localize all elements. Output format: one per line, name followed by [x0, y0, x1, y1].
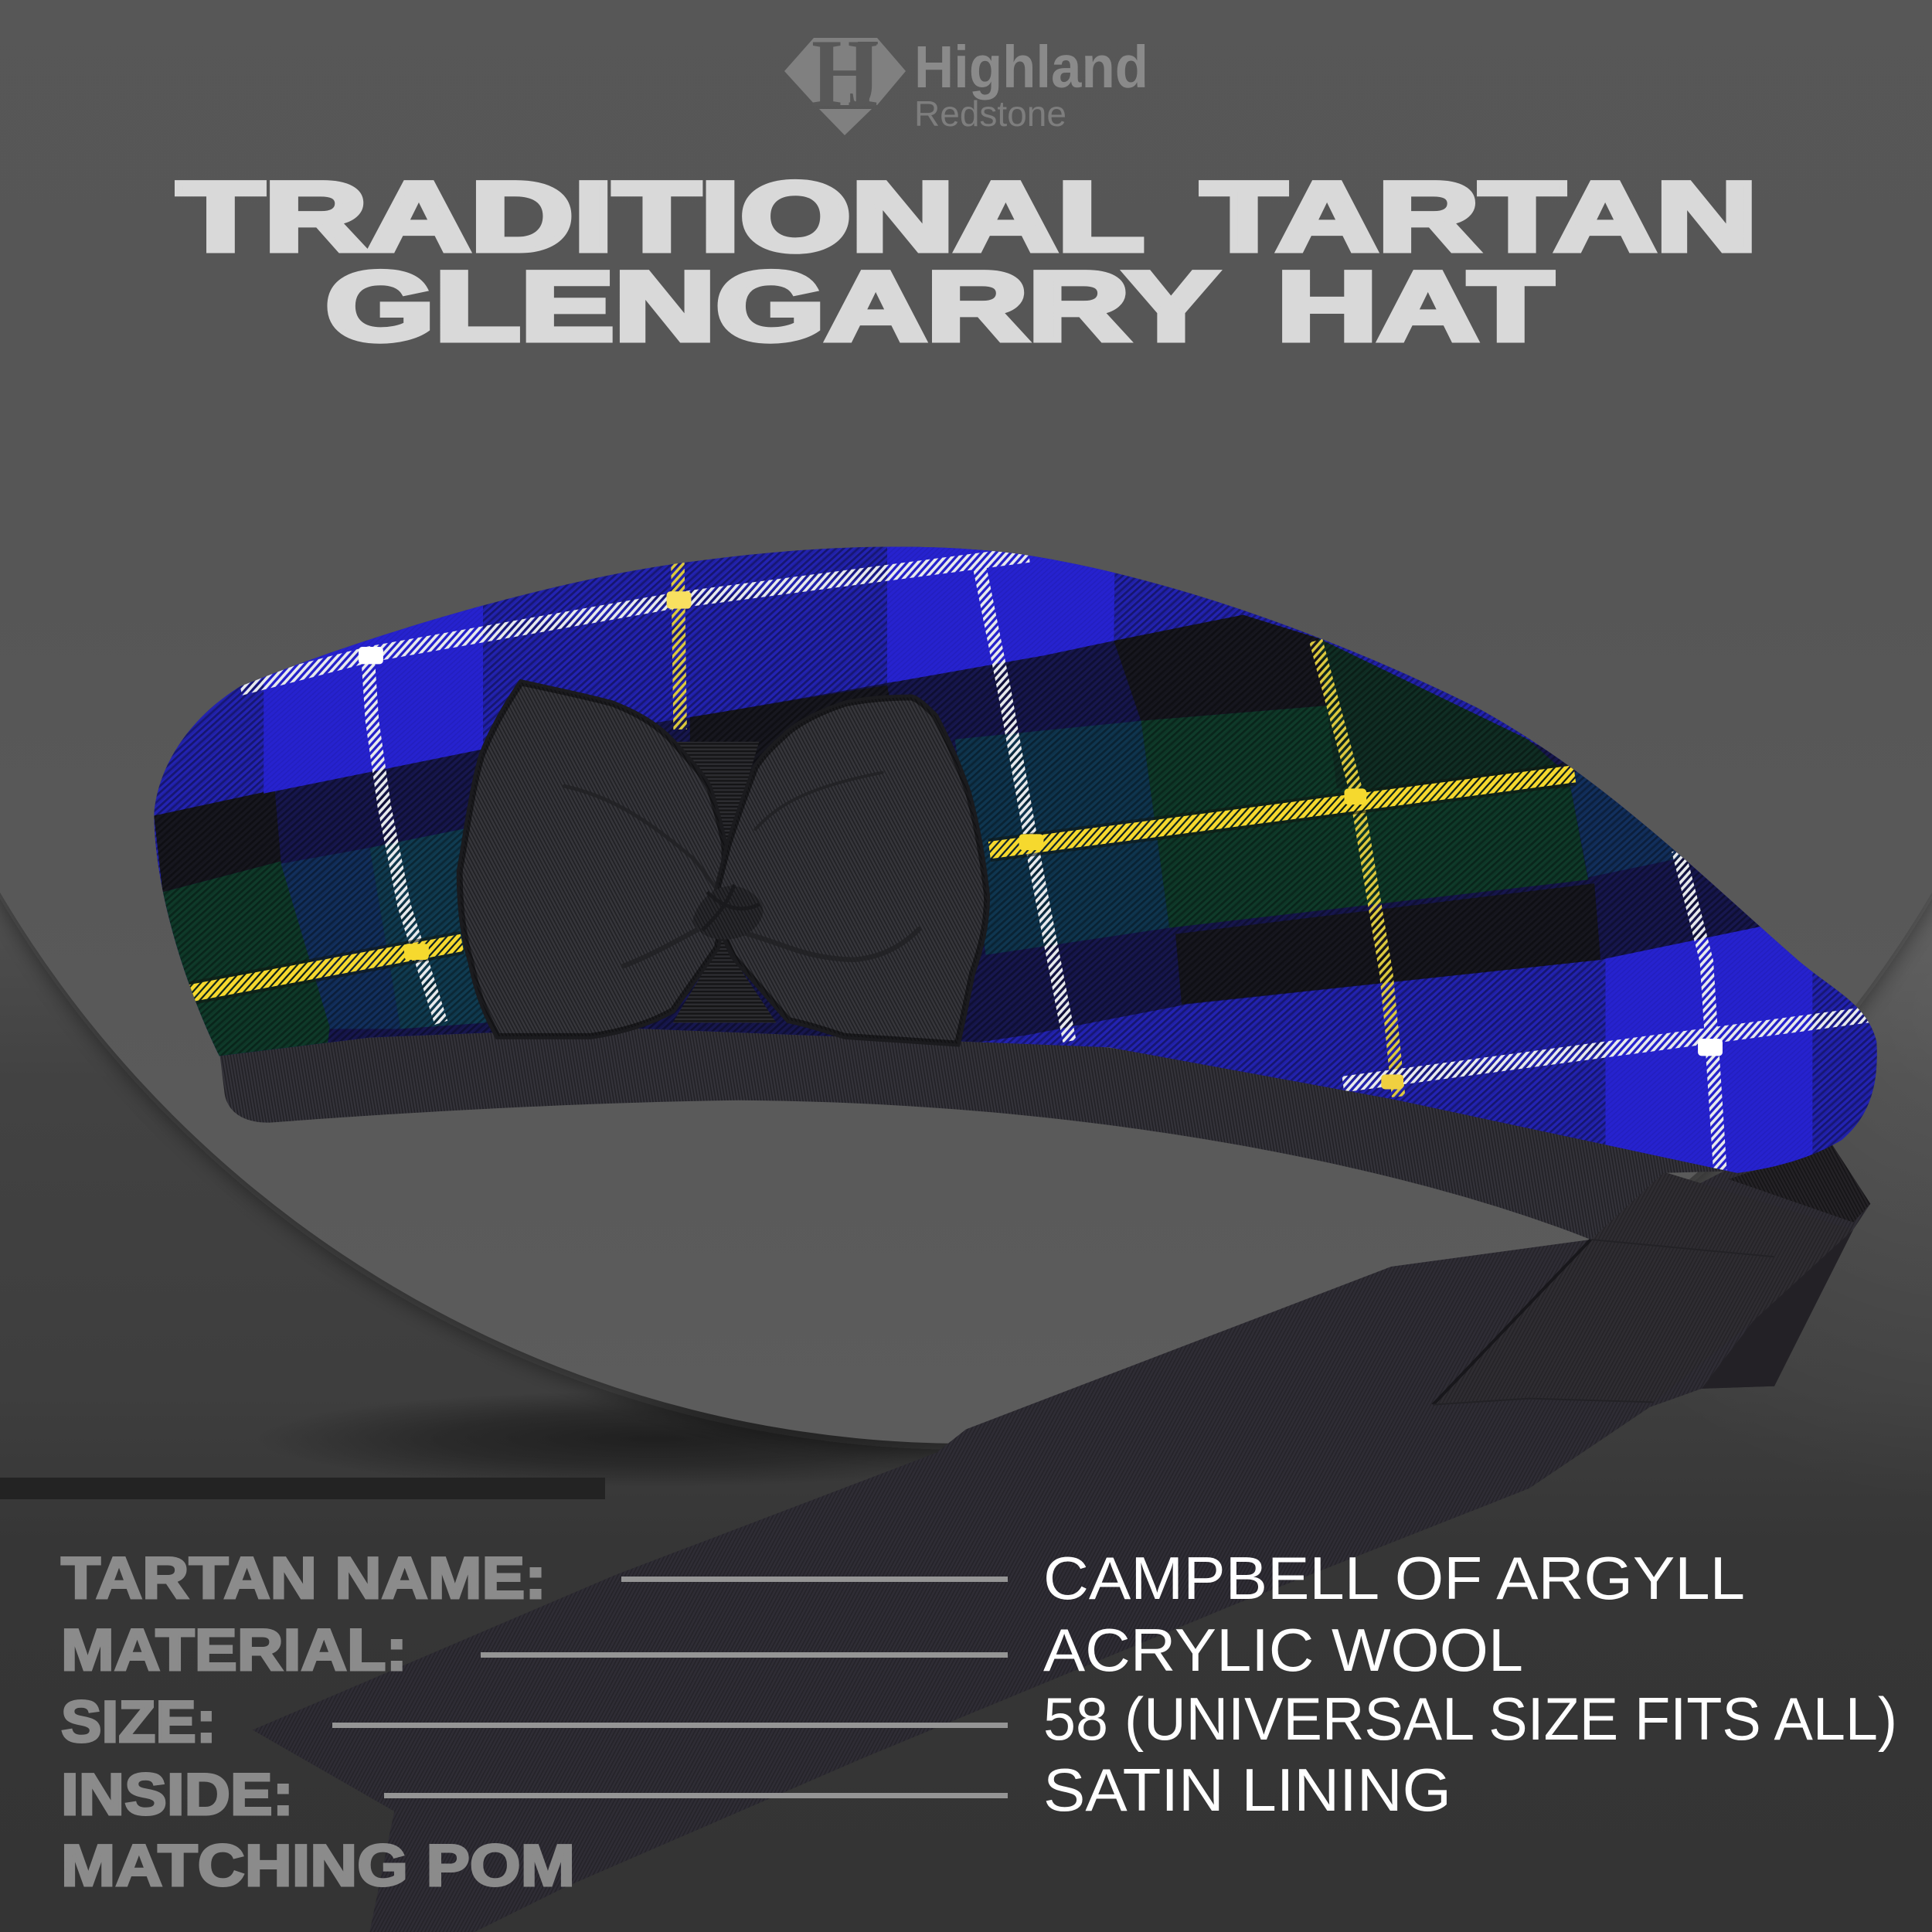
knot [1729, 1145, 1870, 1223]
spec values [1043, 1544, 1897, 1824]
bow centre strap [673, 742, 776, 1022]
green checks [162, 638, 1588, 1084]
bow [460, 682, 987, 1043]
spec values: ACRYLIC WOOL [1043, 1616, 1523, 1684]
spec labels: MATERIAL: [61, 1617, 407, 1683]
title: GLENGARRY [325, 251, 1218, 361]
bright blue checks [264, 530, 1812, 1183]
ribbon tail [253, 1145, 1870, 1932]
connector lines [332, 1577, 1008, 1798]
spec labels [61, 1546, 575, 1899]
spec values: 58 (UNIVERSAL SIZE FITS ALL) [1043, 1685, 1897, 1753]
spec labels: INSIDE: [61, 1762, 294, 1828]
logo name: Highland [914, 34, 1148, 100]
bow right wing [713, 697, 987, 1043]
logo [784, 20, 1148, 135]
horizontal pinstripes [191, 554, 1872, 1084]
logo mark: H [811, 20, 878, 128]
title: TARTAN [1201, 162, 1757, 271]
base blue [154, 547, 1877, 1173]
logo subname: Redstone [914, 94, 1066, 134]
spec labels: MATCHING POM [61, 1833, 575, 1899]
vertical pinstripes [367, 560, 1720, 1171]
footer accent bar [0, 1478, 605, 1499]
logo mark: J [849, 20, 879, 128]
bow folds [564, 773, 919, 966]
spec values: CAMPBELL OF ARGYLL [1043, 1544, 1745, 1612]
spec labels: SIZE: [61, 1689, 216, 1755]
tartan crown [154, 547, 1877, 1173]
stripe crossings [359, 591, 1723, 1089]
bow left wing [460, 682, 725, 1036]
hat band [219, 1025, 1750, 1240]
woven texture [155, 547, 1877, 1173]
logo mark [784, 20, 906, 135]
title: TRADITIONAL [177, 162, 1145, 271]
spec labels: TARTAN NAME: [61, 1546, 546, 1611]
background circle [0, 0, 1932, 1487]
spec values: SATIN LINING [1043, 1756, 1451, 1824]
blue-green checks [281, 721, 1719, 1029]
dark band base [155, 615, 1760, 1056]
fold creases [1433, 1240, 1590, 1405]
title [177, 162, 1757, 361]
back lobe [1702, 1230, 1853, 1389]
title: HAT [1277, 251, 1553, 361]
hat [123, 518, 1932, 1932]
background right glow [1391, 464, 1932, 1546]
bow knot [692, 885, 763, 940]
centre lobe [1433, 1172, 1853, 1405]
black checks [154, 615, 1600, 1004]
